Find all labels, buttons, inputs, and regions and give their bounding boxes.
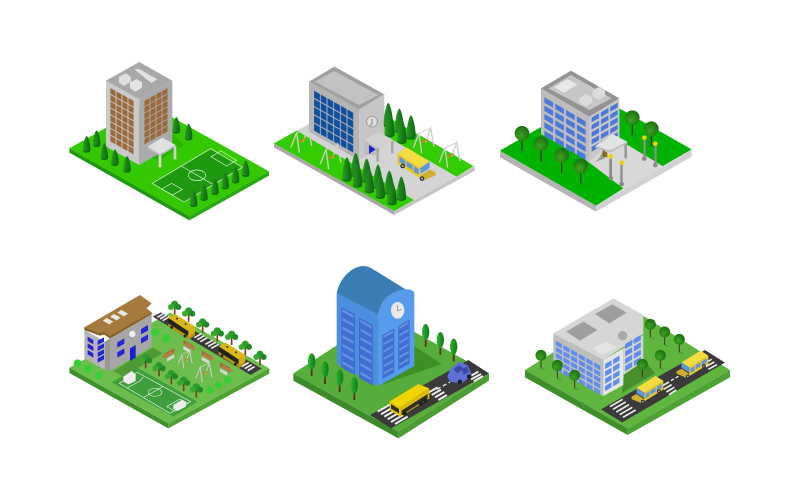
school building <box>84 295 152 370</box>
ground slab <box>69 104 269 220</box>
clock <box>391 302 404 319</box>
round trees <box>535 319 685 390</box>
scene 4: brown-roof school with playground <box>69 295 269 428</box>
ground slab <box>69 313 269 428</box>
playground trees <box>139 354 203 398</box>
school buses <box>168 314 245 368</box>
ground slab <box>525 306 730 435</box>
building shadow <box>113 348 163 377</box>
school bus <box>389 384 429 417</box>
school building <box>553 298 643 396</box>
front trees <box>83 130 249 207</box>
swings <box>291 128 460 169</box>
ground slab <box>274 98 475 215</box>
benches <box>162 340 233 376</box>
round shrubs <box>74 328 231 394</box>
scene 3: blue-window office with lamps <box>500 71 692 212</box>
round trees <box>515 110 659 185</box>
school bus <box>397 147 436 181</box>
grey building <box>309 67 384 160</box>
background trees <box>168 301 267 365</box>
trees <box>308 324 457 400</box>
scene 6: grey-roof school with two buses <box>525 298 730 435</box>
road with crossings <box>601 350 725 422</box>
ground slab <box>500 95 692 212</box>
street lamps <box>608 135 658 186</box>
football pitch <box>112 368 197 417</box>
football pitch <box>152 149 242 202</box>
road with crossings <box>153 312 262 375</box>
front trees <box>342 153 406 205</box>
scene 2: grey block with school bus and swings <box>274 67 475 215</box>
swings <box>178 351 212 383</box>
entrance canopy <box>364 132 394 162</box>
office building <box>541 71 619 162</box>
tower <box>106 62 172 165</box>
road with crossings <box>370 360 489 428</box>
ground slab <box>293 315 489 438</box>
school buses <box>632 351 708 404</box>
trees behind tower <box>173 117 192 140</box>
trees behind <box>384 103 416 144</box>
entrance canopy <box>591 134 627 163</box>
scene 1: brown tower with football field <box>69 62 269 220</box>
blue car <box>447 362 472 384</box>
entrance canopy <box>148 138 176 167</box>
scene 5: blue arched clock tower <box>293 266 489 438</box>
tower <box>337 266 414 386</box>
